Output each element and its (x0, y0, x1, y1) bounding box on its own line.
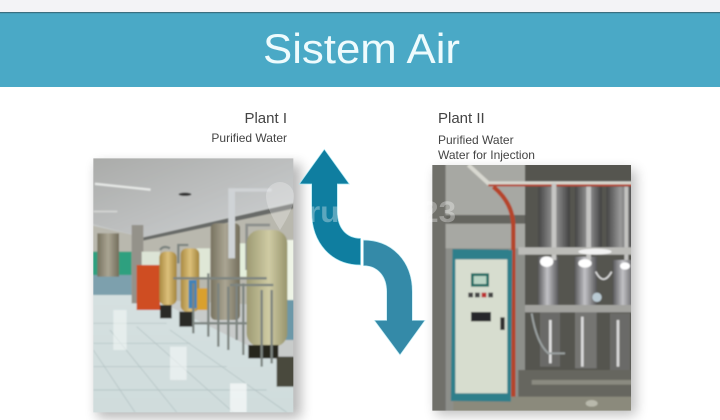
heading: Plant I: Plant I (244, 110, 287, 127)
heading: Plant II: Purified Water (438, 133, 514, 147)
heading: Plant II: Water for Injection (438, 148, 535, 162)
title: Sistem Air (263, 25, 460, 72)
heading: Plant I: Purified Water (211, 131, 287, 145)
arrow: down to Plant II (363, 240, 425, 355)
photo: Plant II distillation unit (429, 162, 636, 415)
photo: Plant I water treatment room (90, 155, 301, 418)
heading: Plant II: Plant II (438, 110, 485, 127)
watermark: rumah123 (308, 196, 456, 229)
heading: Plant I (211, 110, 287, 145)
title banner (0, 12, 720, 87)
watermark (266, 182, 456, 230)
top strip (0, 0, 720, 12)
arrow: up to Plant I (299, 149, 361, 265)
heading: Plant II (438, 110, 535, 162)
